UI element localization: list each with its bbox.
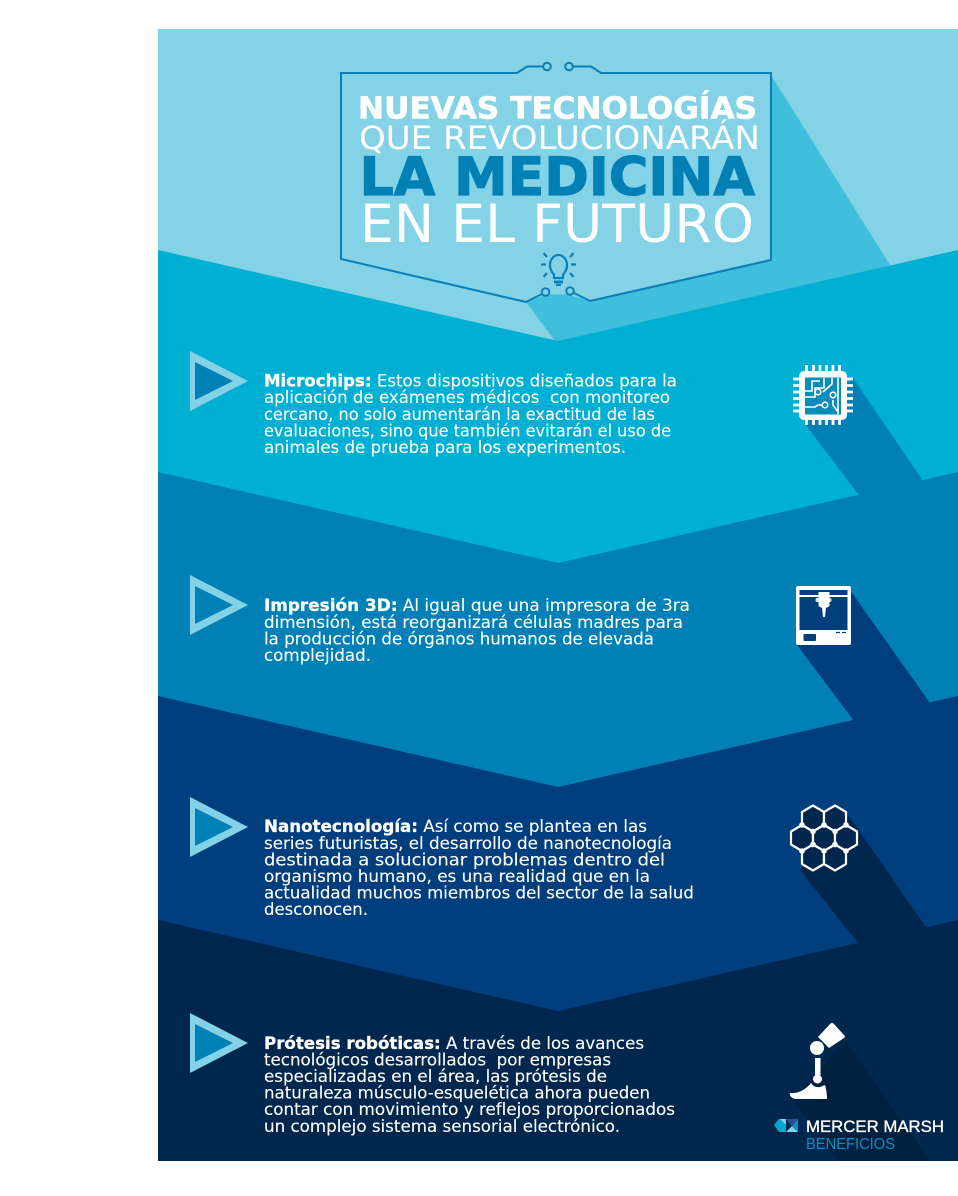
text: microchips: cercano, no solo aumentarán la exactitud de las [264, 405, 655, 424]
title: LA MEDICINA [360, 147, 755, 208]
panel: band protesis [158, 920, 958, 1161]
shadow: prosthesis icon [793, 1040, 930, 1161]
logo: Mercer Marsh Beneficios [774, 1117, 944, 1153]
text: microchips [264, 372, 677, 457]
text: protesis: tecnológicos desarrollados por empresas [264, 1050, 611, 1070]
title: QUE REVOLUCIONARÁN [359, 119, 760, 157]
panel: band microchips [158, 250, 958, 580]
icon: 3D printer [796, 586, 851, 645]
panel: header background [158, 29, 958, 359]
logo: Mercer Marsh Beneficios: MERCER MARSH [806, 1117, 944, 1136]
logo mark [774, 1119, 798, 1132]
text: microchips: Microchips: Estos dispositivos diseñados para la [264, 372, 677, 390]
text: protesis: Prótesis robóticas: A través de los avances [264, 1034, 644, 1053]
icon: triangle 1 [190, 351, 248, 411]
text: microchips: evaluaciones, sino que también evitarán el uso de [264, 422, 671, 440]
text: protesis [264, 1034, 675, 1136]
text: impresion 3D: complejidad. [264, 646, 371, 665]
icon: triangle 2 [190, 575, 248, 635]
panel: band impresion 3D [158, 472, 958, 800]
text: impresion 3D: Impresión 3D: Al igual que una impresora de 3ra [264, 596, 690, 615]
text: protesis: especializadas en el área, las prótesis de [264, 1067, 607, 1086]
text: protesis: naturaleza músculo-esquelética ahora pueden [264, 1084, 650, 1102]
text: nanotecnologia: desconocen. [264, 900, 368, 919]
shadow: 3D printer icon [797, 590, 930, 725]
icon: light bulb [541, 253, 576, 285]
title: EN EL FUTURO [360, 194, 754, 255]
text: protesis: contar con movimiento y reflejos proporcionados [264, 1100, 675, 1119]
text: impresion 3D: dimensión, está reorganizará células madres para [264, 613, 683, 632]
text: nanotecnologia: Nanotecnología: Así como se plantea en las [264, 817, 647, 836]
shadow: nano icon [800, 815, 926, 950]
title [358, 90, 760, 255]
panel: band nanotecnologia [158, 696, 958, 1020]
text: microchips: animales de prueba para los experimentos. [264, 438, 626, 457]
text: nanotecnologia: series futuristas, el desarrollo de nanotecnología [264, 834, 672, 853]
title frame [341, 63, 771, 302]
icon: triangle 3 [190, 797, 248, 857]
text: nanotecnologia: destinada a solucionar problemas dentro del [264, 850, 665, 870]
logo: Mercer Marsh Beneficios: BENEFICIOS [806, 1136, 895, 1153]
icon: nano hexagons [791, 806, 857, 870]
icon: prosthetic leg [790, 1023, 845, 1099]
text: protesis: un complejo sistema sensorial electrónico. [264, 1117, 620, 1136]
text: nanotecnologia: actualidad muchos miembros del sector de la salud [264, 884, 694, 902]
text: microchips: aplicación de exámenes médicos con monitoreo [264, 388, 670, 407]
text: impresion 3D: la producción de órganos humanos de elevada [264, 630, 654, 648]
text: nanotecnologia [264, 817, 694, 919]
shadow: microchip icon [805, 378, 923, 500]
title: NUEVAS TECNOLOGÍAS [358, 90, 757, 126]
text: impresion 3D [264, 596, 690, 665]
icon: microchip [793, 365, 853, 425]
text: nanotecnologia: organismo humano, es una realidad que en la [264, 867, 650, 886]
icon: triangle 4 [190, 1013, 248, 1073]
